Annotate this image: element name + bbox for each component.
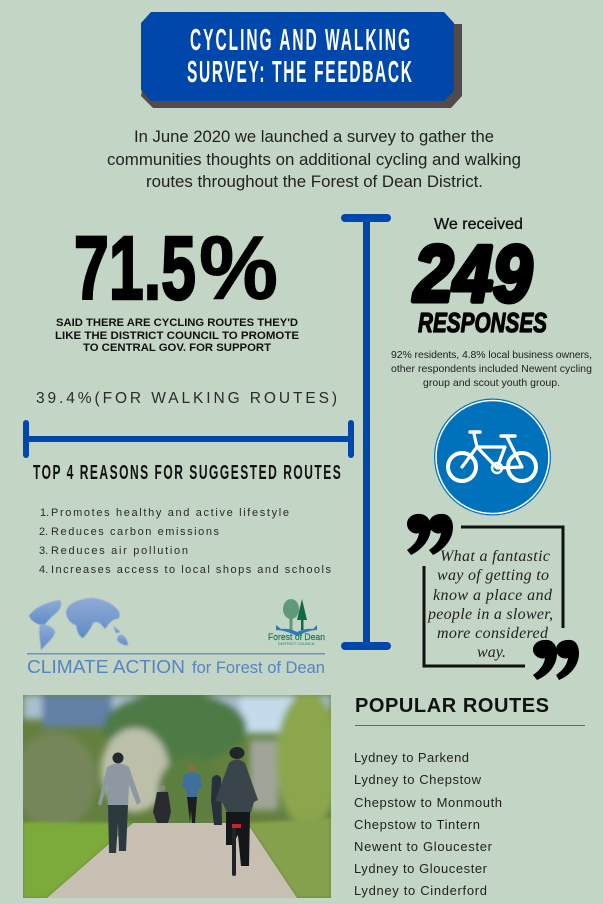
statistic description: SAID THERE ARE CYCLING ROUTES THEY'D [56,317,298,329]
walking statistic: 39.4%(FOR WALKING ROUTES) [36,390,337,407]
statistic: 71.5%: % [199,219,278,319]
respondents description: other respondents included Newent cycling [391,363,592,375]
reasons list: 1. [40,507,49,519]
statistic description: TO CENTRAL GOV. FOR SUPPORT [83,342,271,354]
icon: opening quotation marks [407,514,453,555]
title banner: CYCLING AND WALKING [190,23,410,58]
reasons list: 2. [39,526,48,538]
responses label: RESPONSES [418,307,547,338]
statistic: 71.5%: 71.5 [74,219,196,319]
popular routes list: Lydney to Parkend [354,750,469,765]
intro text: routes throughout the Forest of Dean District. [146,173,483,191]
title banner: SURVEY: THE FEEDBACK [187,55,412,90]
photo: walkers and cyclist on a path [13,692,340,898]
icon: globe [29,598,128,650]
quote frame [424,527,563,666]
intro text: In June 2020 we launched a survey to gather the [134,128,494,146]
popular routes list: Lydney to Cinderford [354,883,487,898]
reasons list: 4. [39,564,48,576]
horizontal divider [23,420,354,458]
climate action logo: CLIMATE ACTION [27,656,185,677]
vertical divider [341,214,391,650]
popular routes list: Chepstow to Monmouth [354,795,502,810]
statistic description [55,317,299,354]
respondents description: 92% residents, 4.8% local business owners, [391,349,592,361]
forest of dean logo [268,599,325,646]
we received heading: We received [434,216,523,233]
forest of dean logo: Forest of Dean [268,632,325,642]
popular routes list: Newent to Gloucester [354,839,493,854]
icon: closing quotation marks [533,640,579,680]
popular routes list: Lydney to Chepstow [354,772,482,787]
respondents description: group and scout youth group. [423,377,560,389]
quote text: more considered [437,625,549,642]
quote text: know a place and [433,587,553,604]
climate action logo: for Forest of Dean [192,658,325,677]
reasons list: Promotes healthy and active lifestyle [51,507,289,519]
reasons list: 3. [39,545,48,557]
quote text [427,548,553,661]
statistic description: LIKE THE DISTRICT COUNCIL TO PROMOTE [55,330,299,342]
quote text: people in a slower, [427,606,553,623]
reasons list [39,507,332,576]
climate action logo [27,598,325,677]
popular routes list: Lydney to Gloucester [354,861,488,876]
intro text: communities thoughts on additional cycling and walking [107,151,521,169]
person walking [98,752,141,853]
forest of dean logo: DISTRICT COUNCIL [278,641,316,646]
reasons heading: TOP 4 REASONS FOR SUGGESTED ROUTES [33,462,341,484]
popular routes heading: POPULAR ROUTES [355,695,549,717]
quote text: way of getting to [437,567,549,584]
reasons list: Reduces carbon emissions [51,526,220,538]
popular routes list [354,750,502,898]
quote text: way. [477,644,506,661]
cyclist [215,747,258,876]
respondents description [391,349,592,389]
statistic: 249: 249 [412,229,532,318]
title banner [141,12,462,108]
reasons list: Reduces air pollution [51,545,188,557]
distant runners [153,764,222,825]
quote text: What a fantastic [440,548,550,565]
reasons list: Increases access to local shops and schools [51,564,332,576]
intro text [107,128,521,191]
icon: cycle route sign [434,398,551,516]
popular routes list: Chepstow to Tintern [354,817,480,832]
